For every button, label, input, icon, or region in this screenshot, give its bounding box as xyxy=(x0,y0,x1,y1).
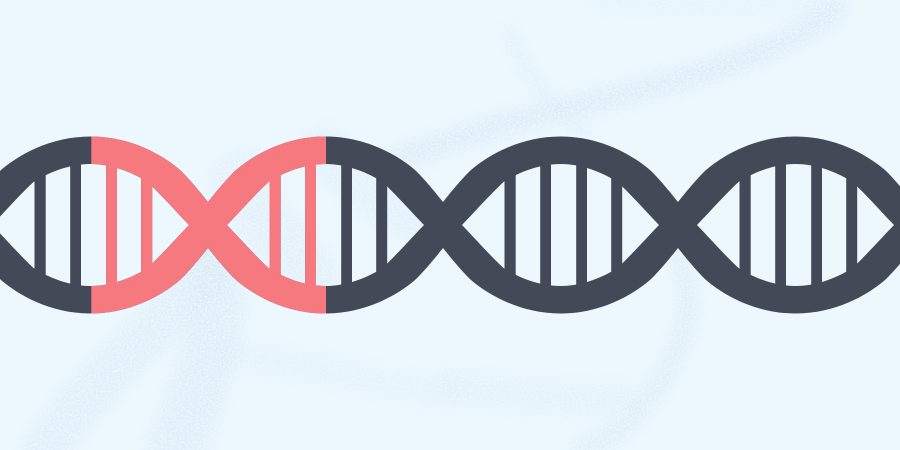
helix strand: dark backbone and rungs xyxy=(0,136,900,314)
DNA helix xyxy=(0,136,900,314)
highlighted gene segment in coral xyxy=(91,136,326,314)
